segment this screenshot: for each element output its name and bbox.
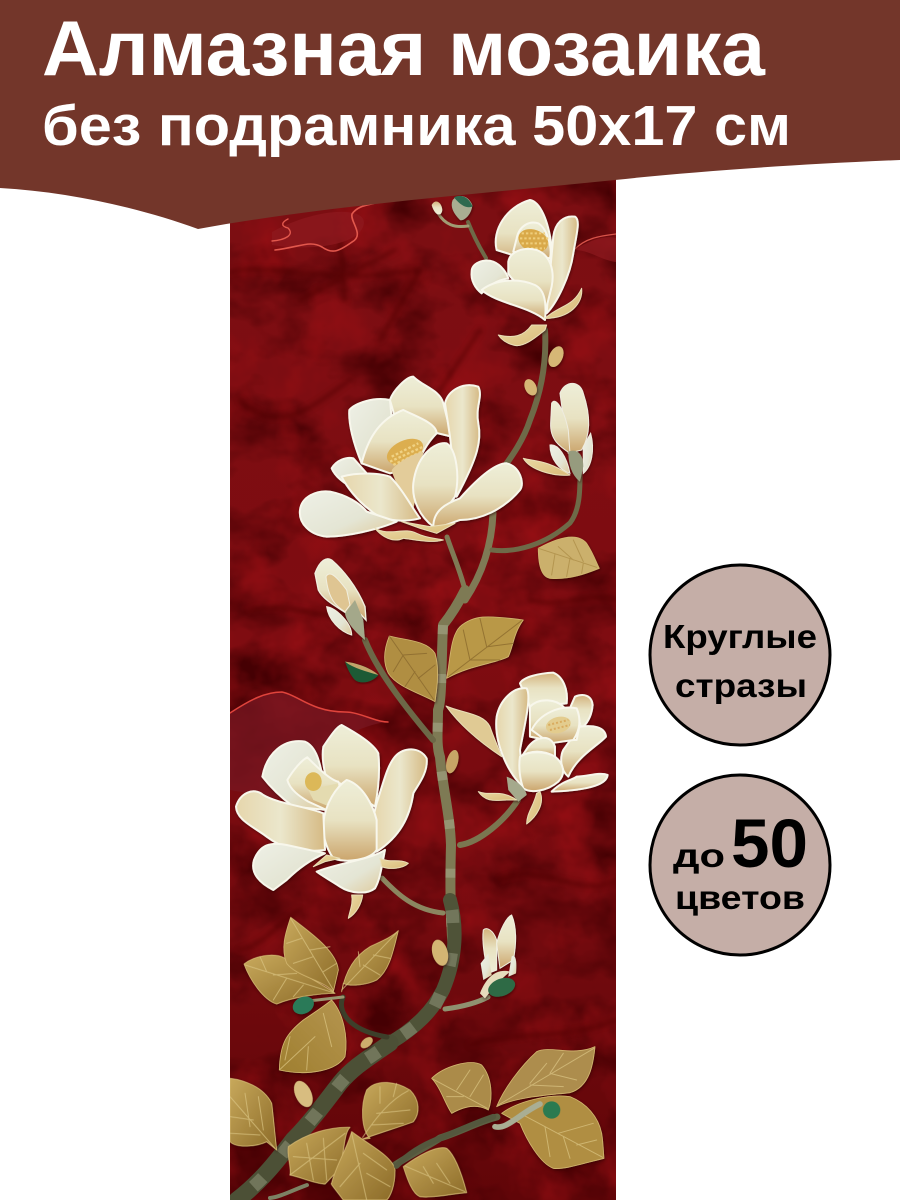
- leaf beside right bud: [538, 537, 599, 579]
- cloud motif top: [272, 203, 616, 262]
- leaves bottom left: [230, 1078, 418, 1200]
- subtitle: без подрамника 50х17 см: [42, 94, 791, 158]
- badge: up to 50 colours: 50: [731, 805, 808, 882]
- right closed bud: [523, 383, 593, 482]
- right twig with green bud: [397, 1101, 560, 1166]
- middle leaves: [385, 617, 523, 702]
- lower stem buds: [290, 938, 451, 1110]
- stamen: [546, 716, 571, 734]
- badge: round rhinestones: [650, 565, 830, 745]
- stamen: [305, 772, 338, 808]
- badge: up to 50 colours: цветов: [675, 879, 805, 916]
- badge: up to 50 colours: до: [673, 837, 725, 874]
- leaves bottom right: [403, 1047, 604, 1197]
- left closed bud: [315, 559, 366, 640]
- banner shape: [0, 0, 900, 229]
- leaf cluster left: [244, 917, 398, 1073]
- stamen: [386, 438, 423, 466]
- branches: [237, 213, 580, 1200]
- right lower flower: [446, 673, 608, 824]
- stem buds: [445, 750, 461, 775]
- large upper flower: [300, 377, 522, 541]
- badge: round rhinestones: Круглые: [663, 618, 817, 655]
- stamen: [518, 229, 548, 252]
- lower small bud with green cup: [480, 915, 518, 1000]
- small buds on upper stem: [522, 344, 567, 398]
- top flower with bud: [432, 196, 582, 346]
- title: Алмазная мозаика: [42, 4, 766, 92]
- green leaflet: [345, 662, 378, 682]
- red fabric background: [230, 175, 616, 1200]
- left lower flower: [236, 725, 427, 918]
- badge: up to 50 colours: [650, 775, 830, 955]
- panel: embroidered magnolia picture: [230, 175, 616, 1200]
- cloud motif middle: [230, 692, 388, 800]
- badge: round rhinestones: стразы: [675, 667, 807, 704]
- header banner: [0, 0, 900, 229]
